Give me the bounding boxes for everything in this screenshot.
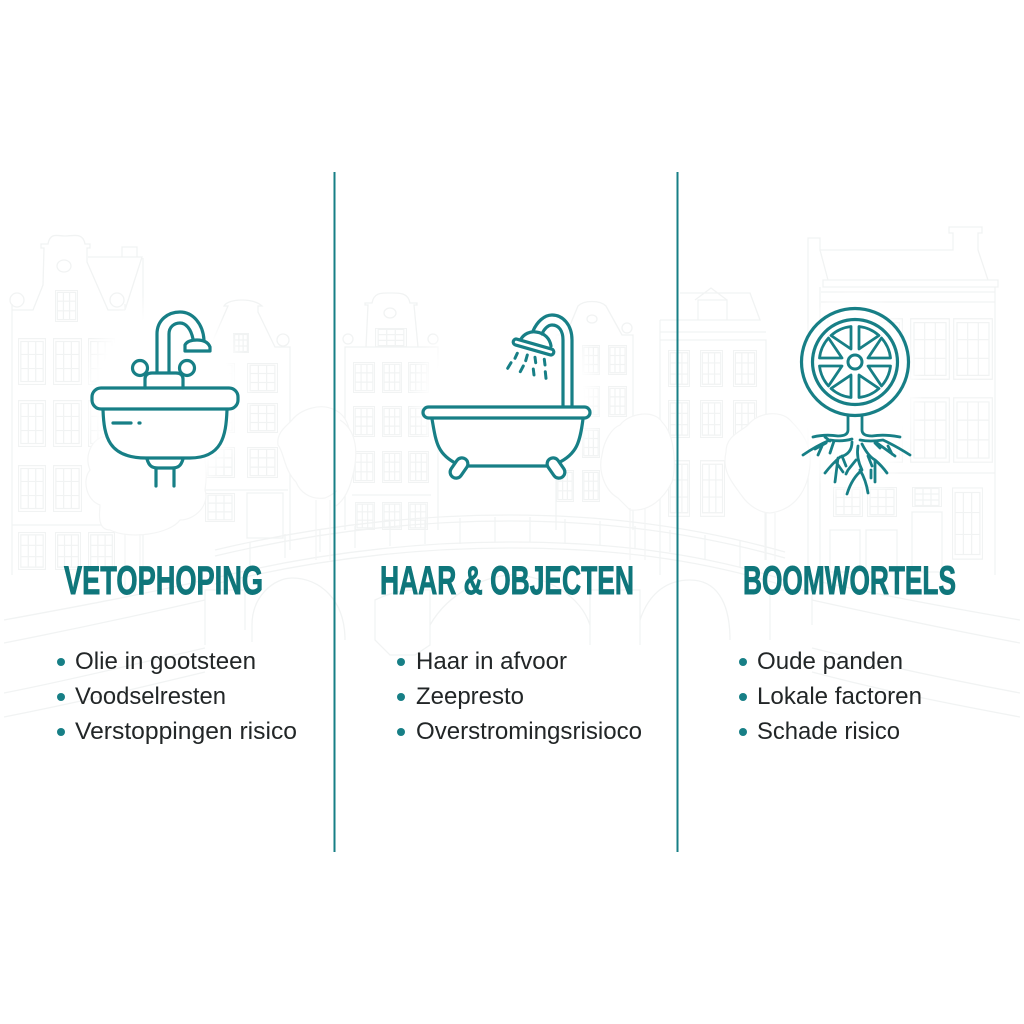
white halos behind icons [77,287,923,503]
heading: HAAR & OBJECTEN [380,559,634,603]
panel: boomwortels [739,308,956,745]
panel: vetophoping [57,312,297,745]
building 3 [343,293,438,530]
icon: bathtub with shower [423,315,590,480]
background trees [86,407,810,590]
bullet list: Schade risico [757,718,900,745]
heading: VETOPHOPING [64,559,263,603]
bullet list: Lokale factoren [757,683,922,710]
vertical divider right [676,172,678,852]
building 2 [195,300,290,550]
bullet list: Oude panden [757,648,903,675]
vertical divider left [334,172,336,852]
icon: sink [92,312,238,486]
tree under sink [86,436,206,590]
tree middle-left [336,420,356,506]
bullet list [739,648,922,745]
bullet list: Zeepresto [416,683,524,710]
panel: haar en objecten [380,315,642,745]
building 5 [660,288,766,575]
background: Amsterdam canal houses and bridge line art [4,227,1020,717]
bullet list [57,648,297,745]
bullet list: Voodselresten [75,683,226,710]
building 1 [10,235,143,575]
building 6 [808,227,998,575]
icon: drain wheel with roots [802,308,910,494]
bridge [4,515,1020,717]
building 4 [556,302,633,530]
bullet list: Verstoppingen risico [75,718,297,745]
bullet list: Haar in afvoor [416,648,567,675]
bullet list: Olie in gootsteen [75,648,256,675]
bullet list: Overstromingsrisioco [416,718,642,745]
tree middle-right [601,414,674,560]
tree right of sink [278,407,352,560]
tree right [725,414,810,560]
bullet list [397,648,642,745]
